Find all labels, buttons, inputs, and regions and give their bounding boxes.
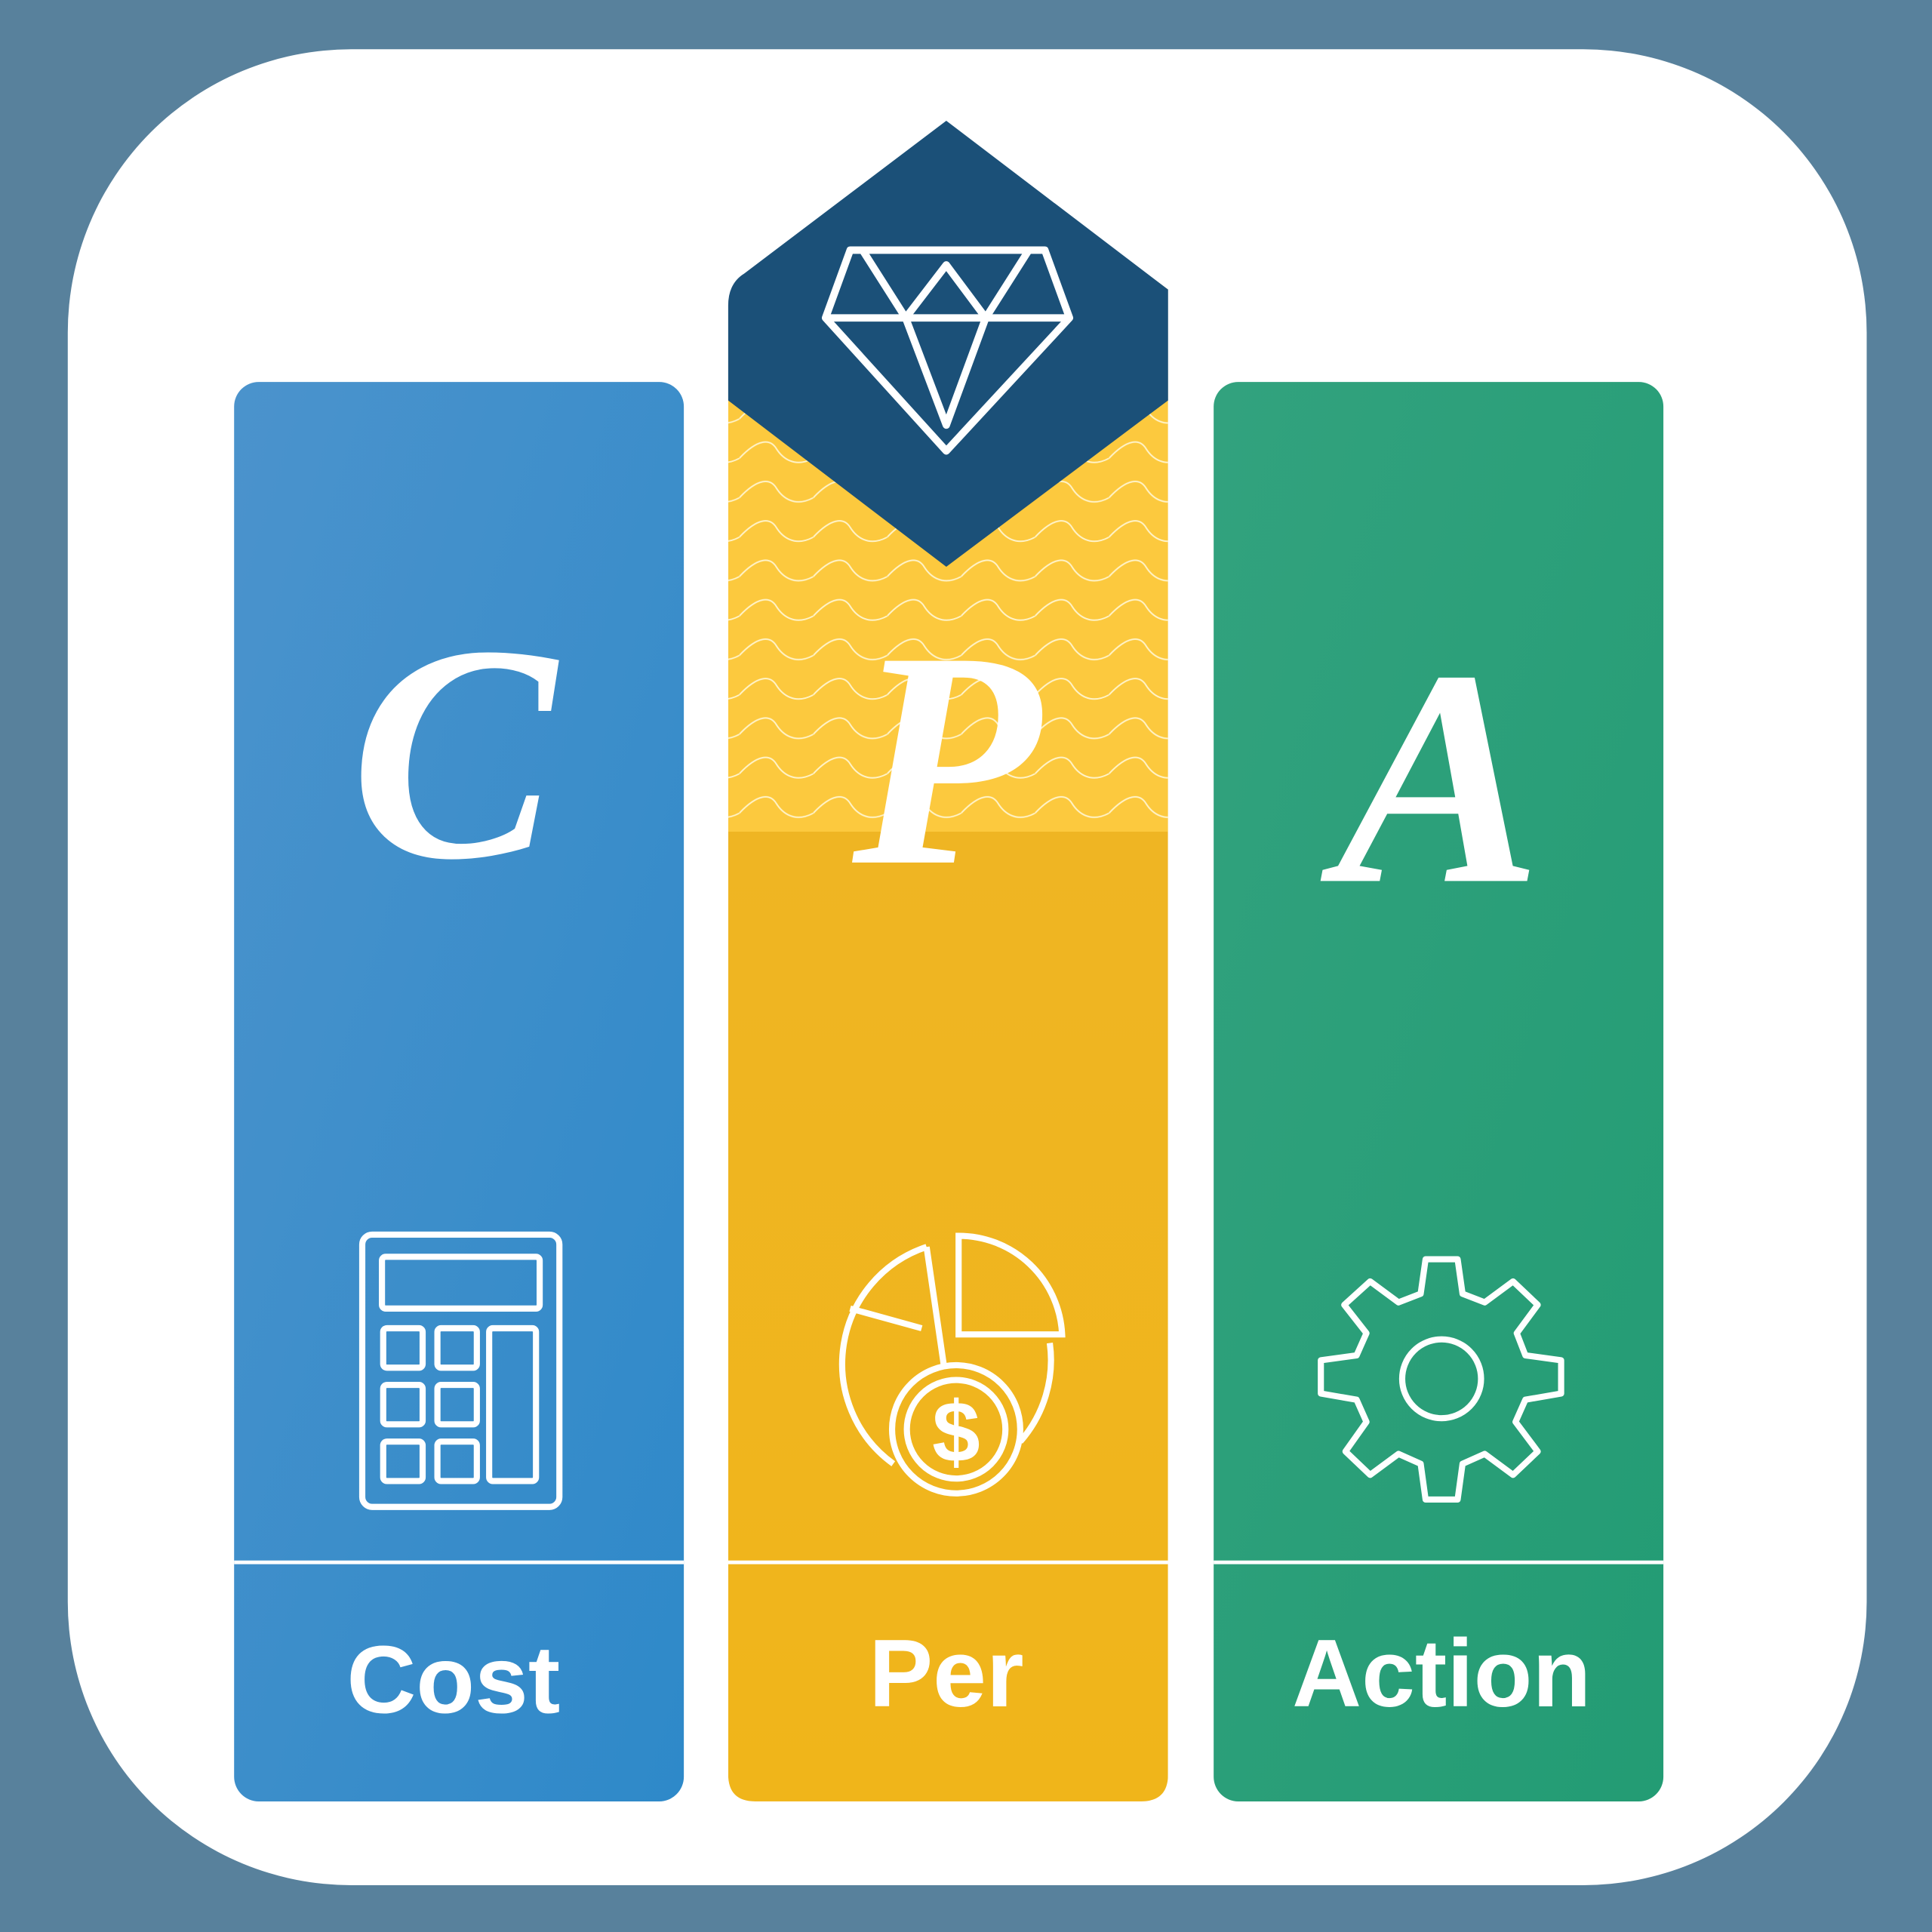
icon: calculator xyxy=(362,1235,559,1507)
panel: per column xyxy=(728,121,1168,1801)
letter P: P xyxy=(848,589,1044,930)
icon: gear xyxy=(1321,1260,1561,1500)
letter A: A xyxy=(1317,607,1542,948)
panel: action column xyxy=(1214,382,1663,1801)
label: Per: Per xyxy=(869,1620,1024,1727)
icon: pie chart with coin xyxy=(842,1236,1062,1494)
panel: cost column xyxy=(234,382,684,1801)
icon: pie chart with coin: $ xyxy=(932,1384,980,1480)
label: Action: Action xyxy=(1292,1620,1591,1727)
label: Cost: Cost xyxy=(346,1626,560,1733)
icon: gem xyxy=(826,250,1069,451)
navy diamond header xyxy=(728,121,1168,567)
letter C: C xyxy=(351,583,562,924)
